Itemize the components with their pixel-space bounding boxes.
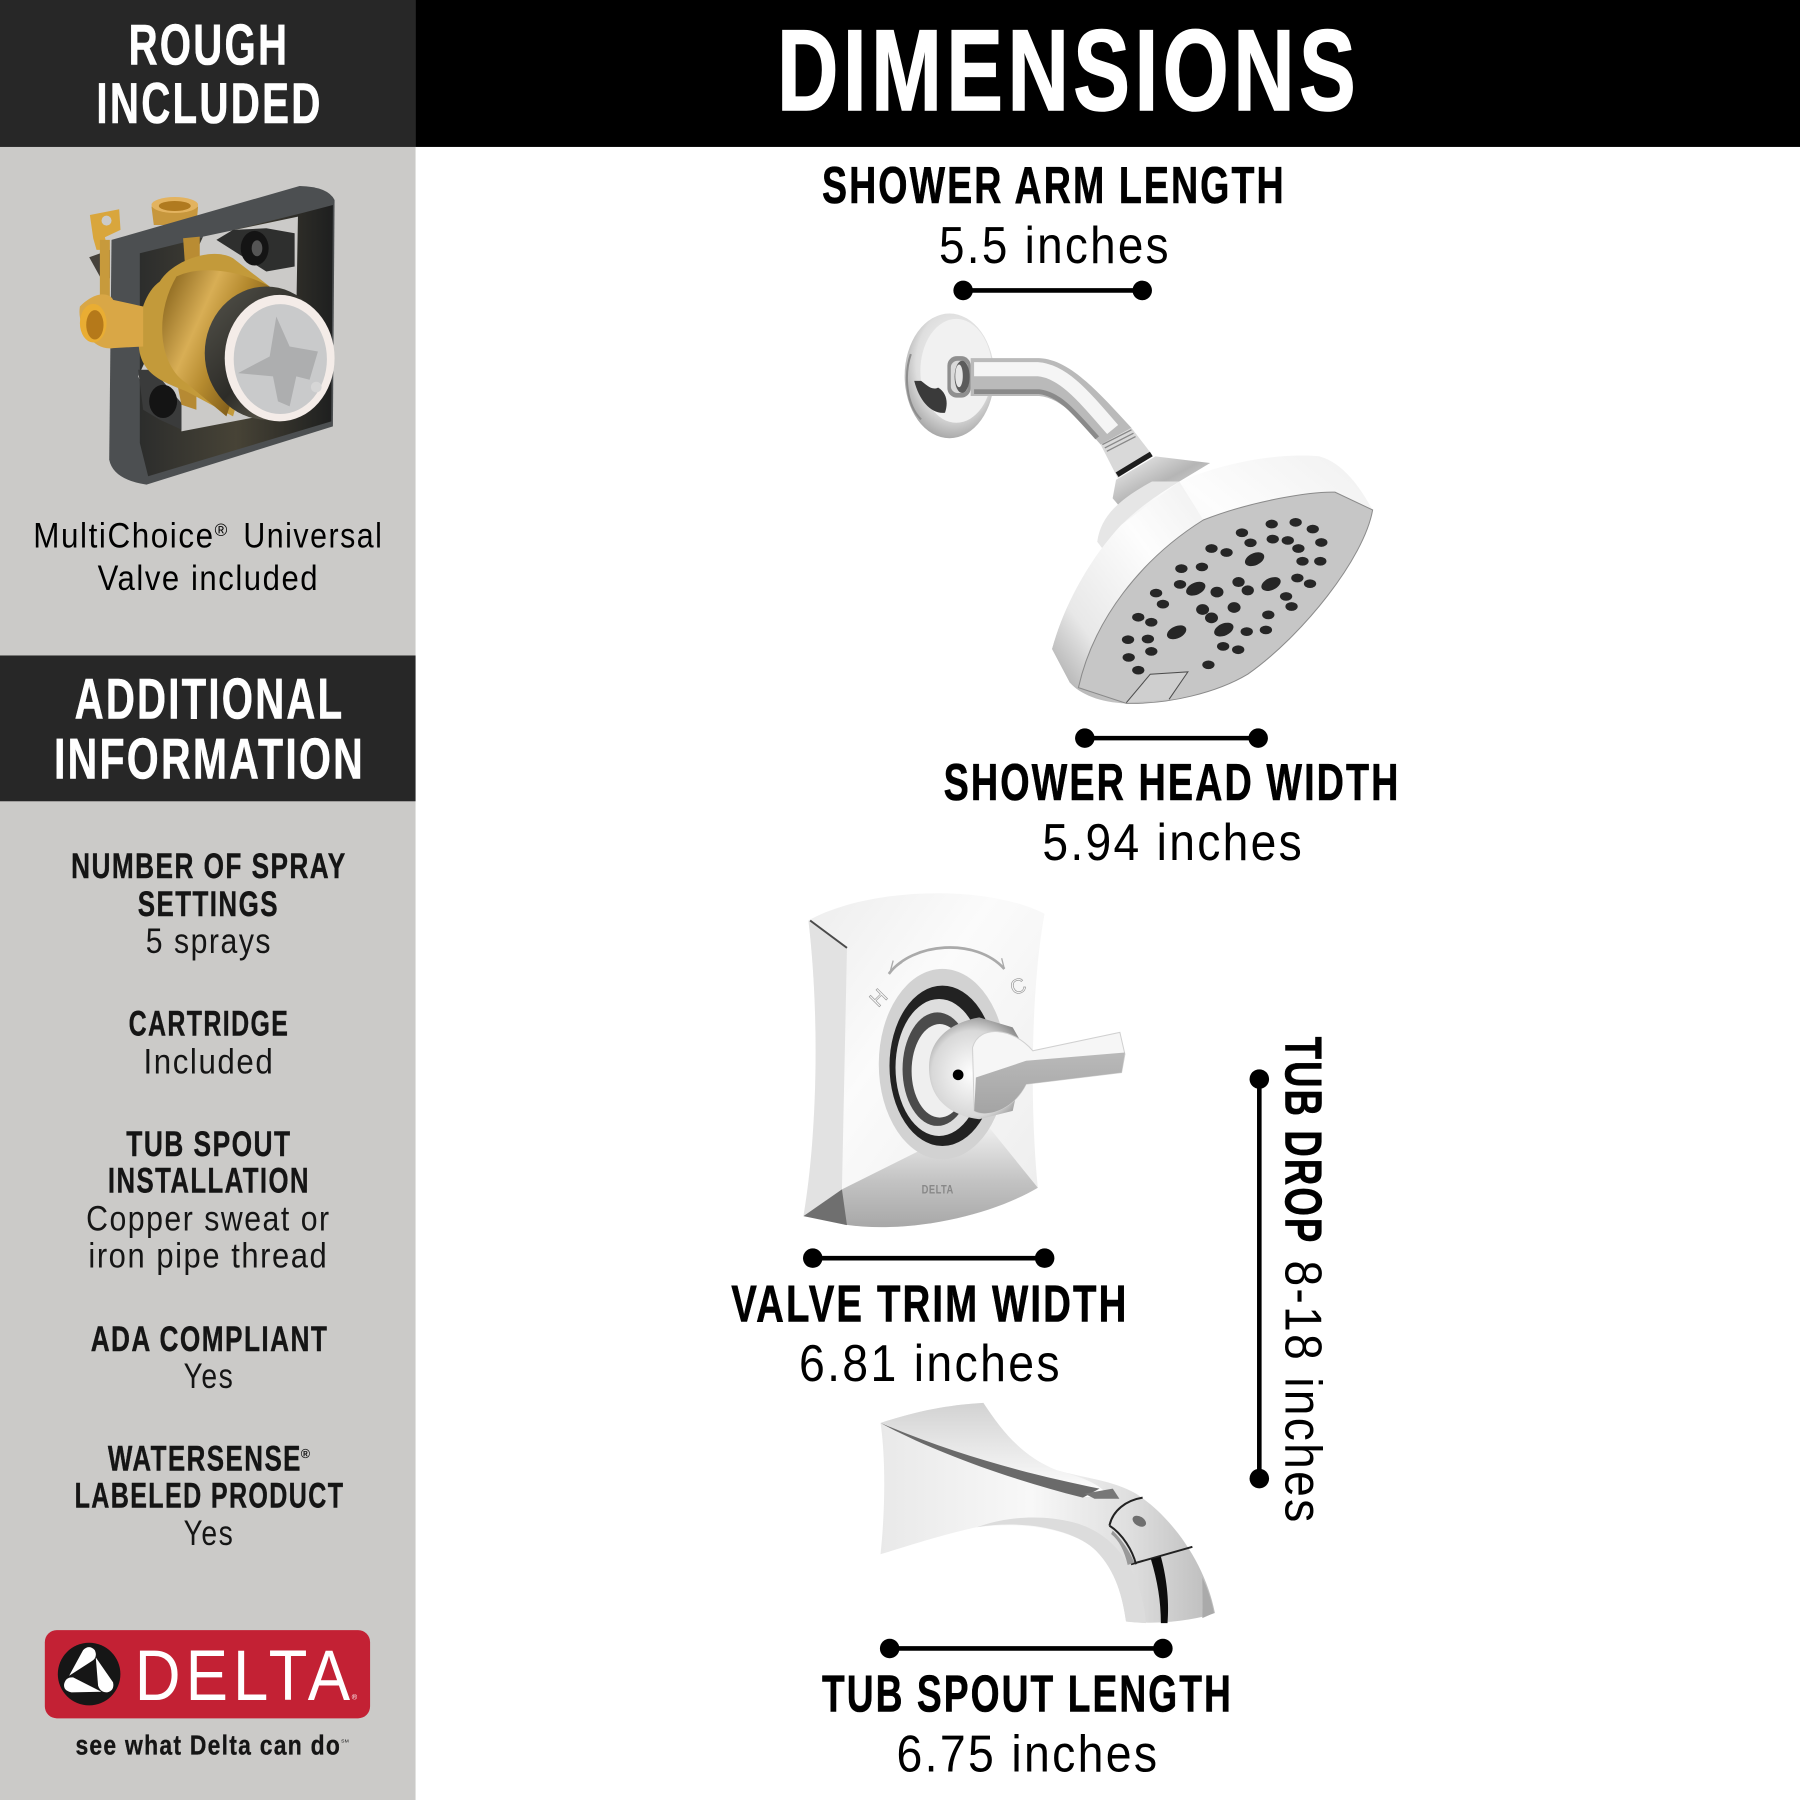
dimension line: tub drop: [1250, 1069, 1269, 1488]
valve trim plate and handle: H: [865, 984, 893, 1012]
label: valve trim width: 6.81 inches: [799, 1334, 1062, 1392]
header: rough included: [0, 0, 416, 147]
Delta logo: DELTA: [135, 1637, 355, 1716]
caption: valve included: Universal: [243, 516, 383, 556]
info: tub spout installation: INSTALLATION: [108, 1161, 310, 1201]
info: spray settings: NUMBER OF SPRAY: [71, 846, 347, 886]
label: tub drop: [1275, 1037, 1333, 1524]
label: shower head width: 5.94 inches: [1042, 813, 1304, 871]
caption: valve included: [33, 516, 383, 598]
header: additional information: [0, 655, 416, 801]
shower head and arm: [905, 314, 1373, 703]
info: tub spout installation: [86, 1124, 331, 1275]
valve trim plate and handle: DELTA: [922, 1183, 954, 1197]
info: cartridge: Included: [143, 1041, 274, 1081]
Delta logo: ®: [352, 1692, 358, 1701]
info: tub spout installation: Copper sweat or: [86, 1199, 331, 1239]
valve trim plate and handle: [803, 893, 1125, 1227]
label: shower arm length: 5.5 inches: [939, 216, 1171, 274]
sidebar panel: [0, 0, 416, 1800]
caption: valve included: MultiChoice: [33, 516, 215, 556]
header: rough included: INCLUDED: [96, 72, 323, 136]
info: ADA compliant: [91, 1319, 328, 1396]
label: tub spout length: [822, 1665, 1233, 1782]
info: watersense: WATERSENSE: [108, 1439, 302, 1479]
info: watersense: Yes: [184, 1513, 234, 1553]
info: watersense: LABELED PRODUCT: [75, 1475, 344, 1515]
info: spray settings: [71, 846, 347, 961]
label: valve trim width: VALVE TRIM WIDTH: [731, 1274, 1128, 1332]
info: ADA compliant: Yes: [184, 1356, 234, 1396]
dimension line: shower head: [1075, 728, 1268, 748]
info: cartridge: [129, 1003, 289, 1081]
info: ADA compliant: ADA COMPLIANT: [91, 1319, 328, 1359]
dimension line: valve trim: [803, 1248, 1054, 1268]
info: cartridge: CARTRIDGE: [129, 1003, 289, 1043]
info: tub spout installation: iron pipe thread: [88, 1235, 328, 1275]
header: additional information: INFORMATION: [54, 727, 365, 791]
icon: rough-in valve: [79, 186, 335, 485]
label: valve trim width: [731, 1274, 1128, 1392]
title banner: DIMENSIONS: [777, 7, 1360, 135]
header: rough included: ROUGH: [129, 13, 289, 77]
Delta logo: see what Delta can do: [75, 1730, 341, 1761]
title banner: [416, 0, 1800, 147]
info: watersense: [75, 1439, 344, 1553]
info: spray settings: SETTINGS: [138, 884, 279, 924]
label: tub drop: 8-18 inches: [1275, 1260, 1333, 1524]
label: shower head width: [944, 753, 1401, 871]
label: tub spout length: 6.75 inches: [897, 1724, 1159, 1782]
info: tub spout installation: TUB SPOUT: [126, 1124, 292, 1164]
label: shower arm length: [822, 156, 1286, 274]
Delta logo: [45, 1630, 370, 1761]
caption: valve included: Valve included: [98, 558, 319, 598]
info: watersense: ®: [301, 1447, 311, 1461]
info: spray settings: 5 sprays: [146, 921, 272, 961]
dimension line: shower arm: [953, 281, 1152, 300]
dimension line: tub spout: [880, 1639, 1173, 1658]
header: additional information: ADDITIONAL: [75, 668, 344, 732]
valve trim plate and handle: C: [1007, 973, 1030, 1000]
label: shower head width: SHOWER HEAD WIDTH: [944, 753, 1401, 811]
tub spout: [881, 1403, 1215, 1623]
label: shower arm length: SHOWER ARM LENGTH: [822, 156, 1286, 214]
caption: valve included: ®: [215, 520, 228, 540]
Delta logo: SM: [341, 1738, 349, 1744]
label: tub spout length: TUB SPOUT LENGTH: [822, 1665, 1233, 1723]
label: tub drop: TUB DROP: [1275, 1037, 1333, 1244]
